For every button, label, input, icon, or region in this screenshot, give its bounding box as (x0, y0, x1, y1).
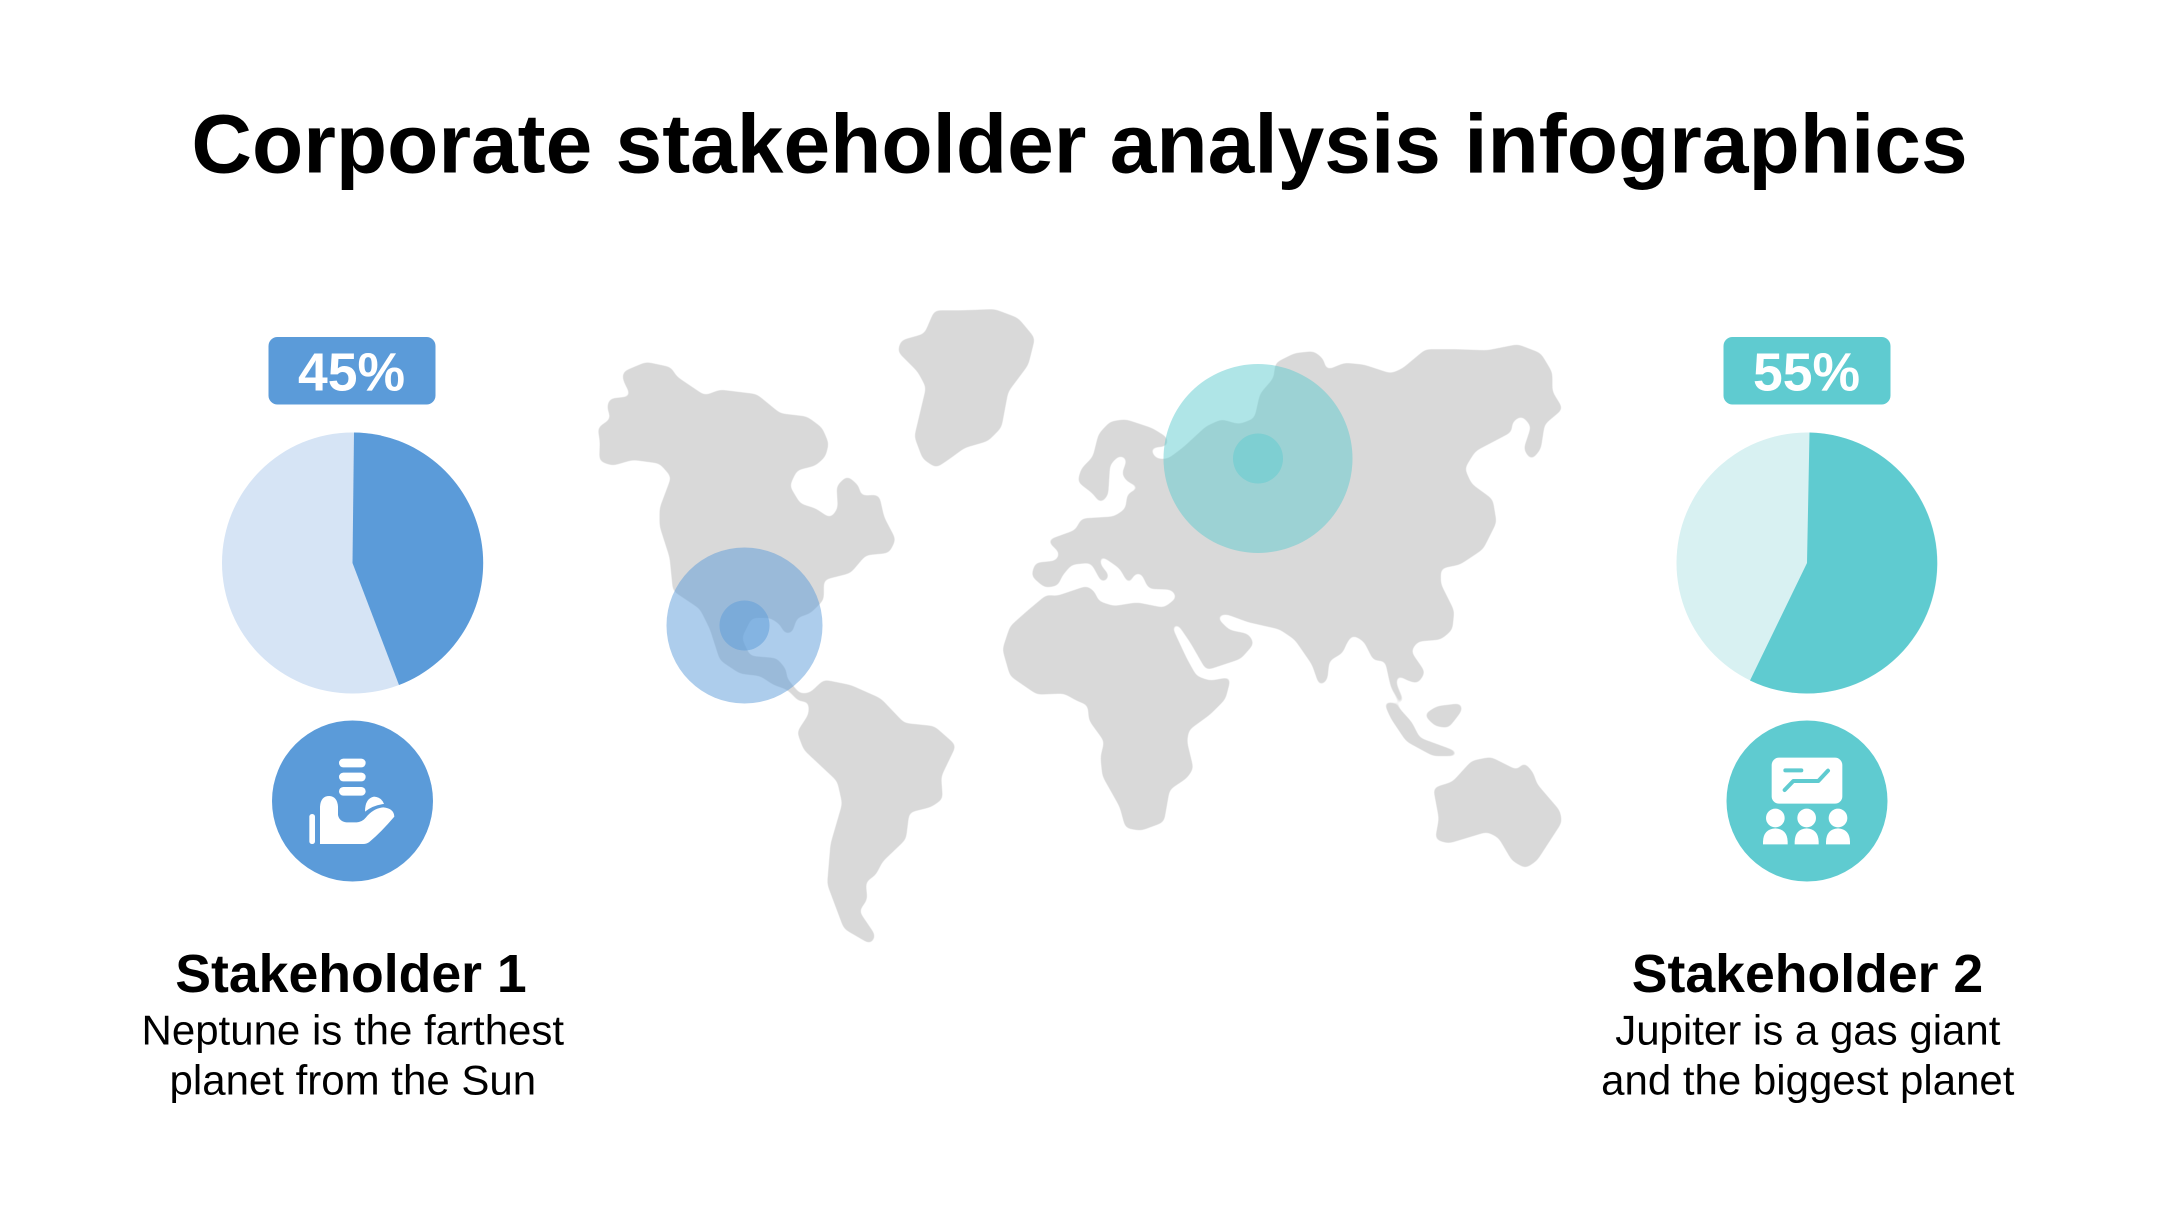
pie chart: 55% (1676, 432, 1938, 694)
heading: Stakeholder 2: Stakeholder 2 (1632, 944, 1983, 1004)
panel: stakeholder 2 (1601, 337, 2015, 1104)
map marker: Russia (1164, 364, 1352, 553)
badge: 55%: 55% (1753, 344, 1860, 402)
badge: 45%: 45% (298, 344, 405, 402)
title: Corporate stakeholder analysis infographics (191, 96, 1968, 190)
heading: Stakeholder 1: Stakeholder 1 (175, 944, 527, 1004)
text: description 2: Jupiter is a gas giant (1615, 1006, 2001, 1054)
panel: stakeholder 1 (142, 337, 564, 1104)
badge: 55% (1724, 337, 1890, 404)
map marker: North America (666, 548, 822, 704)
pie chart: 45% (222, 432, 483, 694)
text: description 1: Neptune is the farthest (142, 1006, 564, 1054)
text: description 1: planet from the Sun (170, 1056, 536, 1104)
icon: presentation audience (1726, 720, 1888, 882)
text: description 2: and the biggest planet (1601, 1056, 2015, 1104)
world map (598, 309, 1563, 945)
icon: hand holding coins (272, 720, 433, 882)
badge: 45% (268, 337, 436, 404)
